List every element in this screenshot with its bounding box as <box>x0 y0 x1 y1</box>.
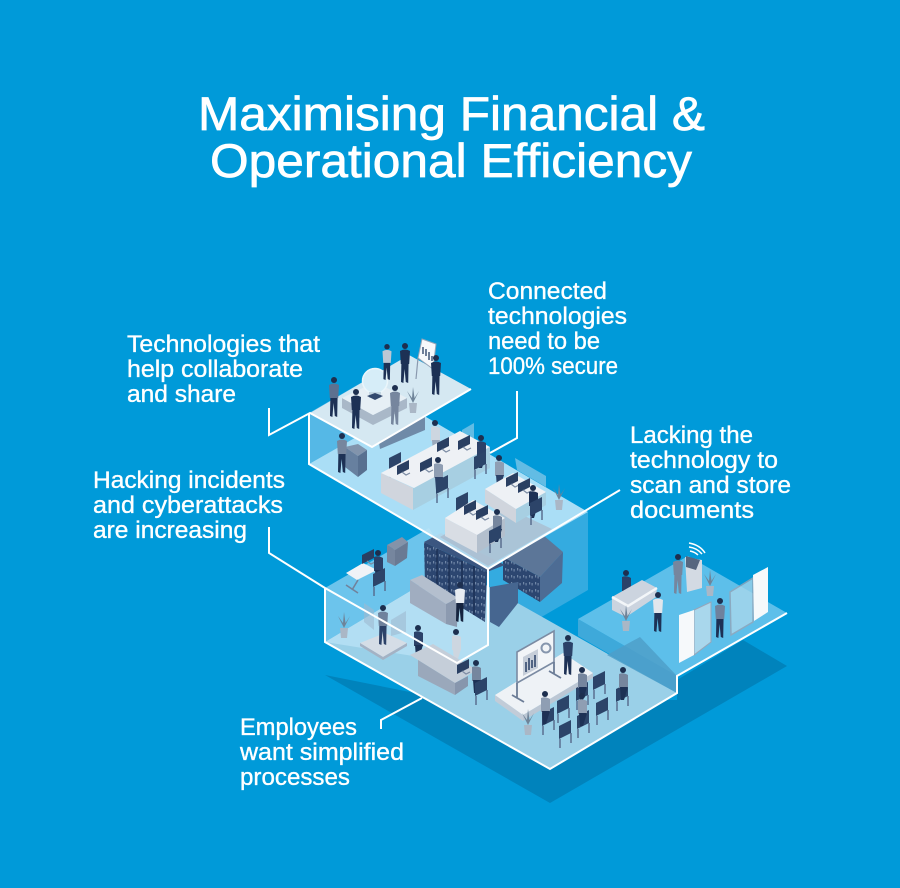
standing desk with worker <box>346 549 385 596</box>
rack tops seen through the floor <box>440 510 552 566</box>
presentation area <box>495 631 628 748</box>
printer and person <box>337 433 367 477</box>
outline: server room and leader: hacking <box>269 527 488 663</box>
callout: employees: want simplified <box>239 739 404 766</box>
leader line: employees <box>381 698 422 729</box>
callout: hacking incidents: are increasing <box>93 517 247 544</box>
audience chairs <box>542 671 628 748</box>
leader line: connected technologies <box>490 391 517 453</box>
panel: reception floor <box>578 556 787 693</box>
callout: hacking incidents <box>93 467 285 544</box>
isometric office illustration <box>309 339 787 803</box>
callout: employees: Employees <box>240 714 357 741</box>
cabinet <box>387 537 408 566</box>
floor shadow <box>325 640 787 803</box>
person <box>382 344 392 380</box>
panel: middle office floor <box>309 407 588 569</box>
office floor items <box>337 420 565 553</box>
callout: technologies that help: help collaborate <box>127 356 303 383</box>
desk cluster three <box>445 492 505 553</box>
reception <box>612 543 768 663</box>
flip chart <box>416 339 437 385</box>
people on the plate <box>329 343 441 429</box>
outline: middle floor and leader: lacking technology <box>309 413 620 569</box>
outline: main floor <box>325 588 787 769</box>
plant <box>620 605 632 631</box>
callout: lacking technology: documents <box>630 497 754 524</box>
presenter <box>563 635 573 675</box>
callout: connected technologies: need to be <box>488 328 600 355</box>
plant <box>553 484 565 510</box>
title <box>198 87 705 187</box>
callout: lacking technology: scan and store <box>630 472 791 499</box>
title: Operational Efficiency <box>210 134 693 187</box>
icon: light bulb <box>362 368 388 400</box>
plant <box>522 709 534 735</box>
receptionist <box>622 570 631 603</box>
panel: main floor <box>325 528 677 769</box>
boxes under the plate <box>378 412 425 449</box>
callout: technologies that help: and share <box>127 381 236 408</box>
title: Maximising Financial & <box>198 87 705 140</box>
panel: middle floor right glass wall <box>488 512 588 648</box>
whiteboard <box>512 631 561 702</box>
desk cluster one <box>381 420 490 510</box>
VR platform and person <box>360 603 407 660</box>
callout: technologies that help <box>127 331 320 408</box>
rear door <box>730 567 768 635</box>
reception desk <box>612 580 657 617</box>
audience people <box>541 667 628 726</box>
callout: lacking technology: Lacking the <box>630 422 753 449</box>
meeting desk <box>410 625 487 705</box>
stage <box>495 653 593 721</box>
plate <box>310 355 471 447</box>
callout: employees: processes <box>240 764 350 791</box>
callout: connected technologies: 100% secure <box>488 353 618 380</box>
callout: connected technologies: technologies <box>488 303 627 330</box>
server rack right rear <box>503 535 563 602</box>
front door <box>679 602 711 663</box>
callout: employees <box>239 714 404 791</box>
callout: lacking technology <box>630 422 791 524</box>
plant <box>704 570 716 596</box>
callout: technologies that help: Technologies that <box>127 331 320 358</box>
callout: lacking technology: technology to <box>630 447 778 474</box>
callout: connected technologies: Connected <box>488 278 607 305</box>
callout: hacking incidents: Hacking incidents <box>93 467 285 494</box>
visitor with bag <box>653 592 663 632</box>
grey storage block <box>410 575 458 627</box>
desk cluster two <box>485 455 546 525</box>
plant <box>338 612 350 638</box>
panel: top collaboration floor <box>310 339 471 449</box>
server rack corner <box>490 582 518 627</box>
plant <box>407 387 419 413</box>
pedestal <box>342 382 407 425</box>
icon: wifi arcs <box>689 543 705 555</box>
leader line and outline: collaborate <box>269 389 471 447</box>
kiosk and user <box>673 554 702 594</box>
server room <box>338 533 563 660</box>
woman walking <box>715 598 725 638</box>
person at servers <box>455 582 465 622</box>
server racks front row <box>424 533 505 622</box>
panel: middle floor left glass wall <box>309 355 409 464</box>
callout: connected technologies <box>488 278 627 380</box>
callout: hacking incidents: and cyberattacks <box>93 492 283 519</box>
